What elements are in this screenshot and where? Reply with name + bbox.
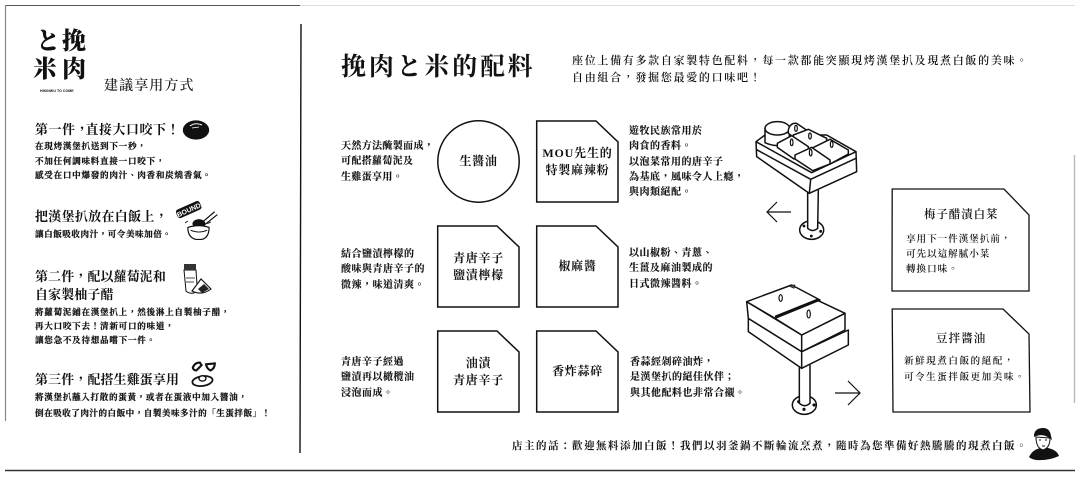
card title: 豆拌醬油 [936,333,986,345]
condiment: Mr MOU spicy powder: 特製麻辣粉 [545,162,610,176]
intro text [572,54,1029,84]
side dish card: pickled cabbage with plum vinegar [891,188,1030,292]
illustration: rice and soy sauce stand [746,284,850,416]
description: oil pickled green chili [341,356,414,399]
step one text [35,141,212,180]
condiment: Mr MOU spicy powder: MOU先生的 [542,146,613,160]
condiment: oil pickled green chili [436,330,520,413]
icon: rice bowl with chopsticks: BOUND [176,202,202,219]
description: green chili salted lemon: 結合鹽漬檸檬的 [341,249,414,260]
card text: 可先以這解膩小菜 [906,249,990,260]
step one text: 在現烤漢堡扒送到下一秒， [35,141,147,151]
condiment: Mr MOU spicy powder [536,120,619,203]
condiment: raw soy sauce circle: 生醬油 [459,154,498,168]
card title: 梅子醋漬白菜 [924,209,998,221]
condiment: oil pickled green chili: 青唐辛子 [453,372,504,386]
heading: condiments title: 挽肉と米的配料 [341,54,536,81]
arrow: points right [835,380,861,406]
icon: rice bowl with chopsticks [176,201,218,240]
step four text: 將漢堡扒蘸入打散的蛋黃，或者在蛋液中加入醬油， [35,392,248,402]
description: Mr MOU spicy powder: 為基底，風味令人上癮， [629,172,744,183]
icon: owner portrait [1029,428,1059,460]
heading: suggested way to enjoy: 建議享用方式 [104,79,195,94]
description: raw soy sauce: 天然方法醃製而成， [341,141,434,152]
condiment: sansho sesame sauce [536,225,619,308]
description: raw soy sauce [341,140,434,183]
logo: hikiniku to come: と [36,29,60,55]
condiment: green chili salted lemon: 青唐辛子 [453,250,504,264]
step three text [35,307,230,345]
card text: 轉換口味。 [906,264,959,275]
description: Mr MOU spicy powder [629,125,744,198]
step two text: 讓白飯吸收肉汁，可令美味加倍。 [35,229,171,239]
description: green chili salted lemon [341,248,425,291]
card text: 享用下一件漢堡扒前， [906,234,1011,245]
panel: condiments [341,54,1059,460]
condiment: fried garlic [536,330,619,413]
condiment: raw soy sauce circle [437,120,520,203]
step four text: 倒在吸收了肉汁的白飯中，自製美味多汁的「生蛋拌飯」！ [35,408,271,418]
logo: hikiniku to come [33,28,86,93]
description: sansho sesame sauce: 日式微辣醬料。 [629,279,702,290]
condiment: oil pickled green chili: 油漬 [466,356,491,370]
card text [904,356,1026,383]
description: raw soy sauce: 可配搭蘿蔔泥及 [341,156,413,167]
step two heading: 把漢堡扒放在白飯上， [35,209,168,224]
icon: burger patty [182,120,210,140]
arrow: points left [766,202,791,222]
condiment: green chili salted lemon [436,225,520,308]
step three heading: 自家製柚子醋 [35,287,114,302]
owner message: 店主的話：歡迎無料添加白飯！我們以羽釜鍋不斷輪流烹煮，隨時為您準備好熱騰騰的現煮白飯。 [512,441,1028,452]
description: sansho sesame sauce [629,246,713,290]
card text [906,234,1011,275]
panel: suggested way to enjoy [33,28,271,418]
logo: hikiniku to come: 挽 [62,29,86,55]
description: oil pickled green chili: 鹽漬再以橄欖油 [341,372,414,383]
condiment: fried garlic: 香炸蒜碎 [552,364,603,378]
logo: hikiniku to come: 米 [33,57,57,83]
card text: 新鮮現煮白飯的絕配， [904,356,1015,367]
description: sansho sesame sauce: 生薑及麻油製成的 [629,263,713,274]
step four text [35,392,271,418]
icon: raw eggs [192,362,216,387]
condiment: sansho sesame sauce: 椒麻醬 [558,259,597,273]
illustration: table condiment stand [755,120,858,240]
intro text: 座位上備有多款自家製特色配料，每一款都能突顯現烤漢堡扒及現煮白飯的美味。 [572,55,1029,67]
description: oil pickled green chili: 青唐辛子經過 [341,357,404,368]
condiment: green chili salted lemon: 鹽漬檸檬 [453,268,504,282]
icon: grated radish and yuzu vinegar [183,264,212,294]
description: green chili salted lemon: 酸味與青唐辛子的 [341,264,425,275]
description: raw soy sauce: 生雞蛋享用。 [341,172,403,183]
step one text: 不加任何調味料直接一口咬下， [35,156,165,166]
description: Mr MOU spicy powder: 與肉類絕配。 [629,187,692,198]
side dish card: soy sauce for rice [892,308,1031,413]
intro text: 自由組合，發掘您最愛的口味吧！ [572,72,762,84]
step one text: 感受在口中爆發的肉汁、肉香和炭燒香氣。 [35,170,212,180]
step three heading [35,269,166,302]
description: green chili salted lemon: 微辣，味道清爽。 [341,280,425,291]
description: sansho sesame sauce: 以山椒粉、青蔥、 [629,248,713,259]
step four heading: 第三件，配搭生雞蛋享用 [35,372,179,387]
logo: hikiniku to come: HIKINIKU TO COME [40,89,74,93]
step one heading: 第一件，直接大口咬下！ [35,122,180,137]
logo: hikiniku to come: 肉 [62,57,86,83]
description: fried garlic [630,356,746,399]
step three text: 將蘿蔔泥鋪在漢堡扒上，然後淋上自製柚子醋， [35,307,230,317]
description: oil pickled green chili: 浸泡而成。 [341,388,394,399]
description: fried garlic: 與其他配料也非常合襯。 [630,388,746,399]
description: Mr MOU spicy powder: 以泡菜常用的唐辛子 [629,157,724,168]
step three heading: 第二件，配以蘿蔔泥和 [35,269,166,284]
card text: 可令生蛋拌飯更加美味。 [904,372,1026,383]
description: Mr MOU spicy powder: 肉食的香料。 [629,141,692,152]
description: Mr MOU spicy powder: 遊牧民族常用於 [629,126,702,137]
step three text: 讓您急不及待想品嚐下一件。 [35,335,156,345]
description: fried garlic: 香蒜經剁碎油炸， [630,357,714,368]
description: fried garlic: 是漢堡扒的絕佳伙伴； [630,372,735,383]
step three text: 再大口咬下去！清新可口的味道， [35,321,174,331]
